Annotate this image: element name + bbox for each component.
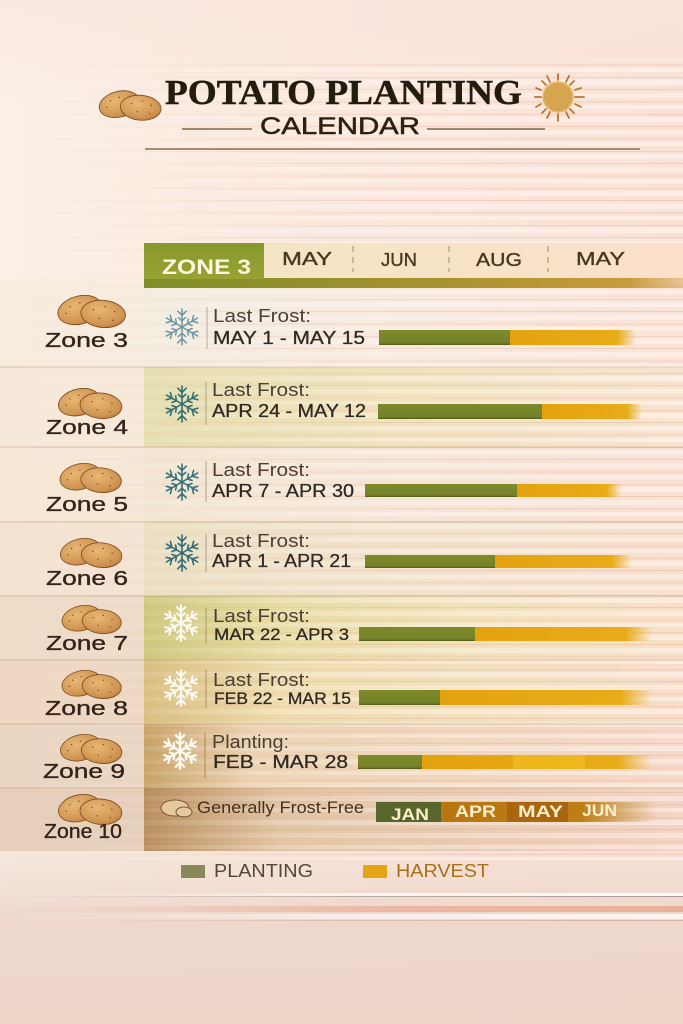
bar: [365, 555, 632, 568]
bar: [359, 690, 652, 705]
legend: harvest: HARVEST: [396, 861, 489, 881]
frost text: [212, 379, 366, 421]
month labels: MAY: [282, 249, 332, 269]
zone label: Zone 9: [43, 760, 125, 783]
frost text: FEB 22 - MAR 15: [214, 689, 351, 708]
frost text: MAR 22 - APR 3: [214, 625, 349, 644]
frost text: APR 1 - APR 21: [212, 550, 351, 571]
zone label: Zone 3: [45, 329, 128, 352]
frost icon: [163, 670, 199, 706]
frost text: Last Frost:: [213, 305, 311, 326]
bar: [358, 755, 652, 769]
month separators: [353, 246, 548, 272]
frost icon: [162, 733, 198, 769]
potato icon: [56, 790, 123, 826]
potato icon: [57, 459, 122, 494]
row: zone 7: [46, 601, 652, 655]
frost icon: [164, 535, 200, 571]
legend: harvest: [363, 861, 489, 881]
bottom band: [144, 278, 683, 288]
small potato icon: [161, 800, 192, 817]
zone 3 tab label: ZONE 3: [162, 256, 251, 279]
month labels: [282, 249, 625, 270]
frost icon: [164, 464, 200, 500]
row backgrounds: [0, 279, 683, 851]
row: zone 3: [45, 291, 636, 352]
potato icon: [59, 666, 122, 700]
month bar: JUN: [582, 802, 617, 820]
icon: sun: [535, 74, 584, 121]
frost text: Last Frost:: [212, 459, 310, 480]
legend: [181, 861, 489, 881]
frost text: Last Frost:: [213, 669, 310, 690]
title rules: [145, 129, 640, 149]
frost text: MAY 1 - MAY 15: [213, 327, 365, 348]
planting text: FEB - MAR 28: [213, 751, 348, 772]
frost text: [213, 669, 351, 708]
month labels: AUG: [476, 250, 522, 270]
zone label: Zone 6: [46, 567, 128, 590]
frost-free text: Generally Frost-Free: [197, 798, 364, 817]
frost text: APR 24 - MAY 12: [212, 400, 366, 421]
zone 3 tab: [144, 243, 264, 279]
frost text: Last Frost:: [213, 605, 310, 626]
row: zone 4: [46, 379, 642, 439]
icon: potatoes: [96, 87, 162, 122]
row: zone 8: [45, 666, 652, 720]
frost text: [213, 605, 349, 644]
frost text: [212, 459, 354, 501]
zone label: Zone 10: [44, 820, 122, 843]
zone label: Zone 5: [46, 493, 128, 516]
row: zone 9: [43, 730, 652, 783]
bar: [365, 484, 622, 497]
potato icon: [58, 534, 123, 569]
month bar: JAN: [391, 806, 429, 824]
month bar: [376, 802, 657, 824]
title block: [96, 73, 640, 149]
table header: [144, 243, 683, 288]
potato icon: [58, 730, 123, 765]
frost text: Last Frost:: [212, 530, 310, 551]
frost text: [212, 530, 351, 571]
heading: potato planting: POTATO PLANTING: [165, 73, 522, 112]
frost text: APR 7 - APR 30: [212, 480, 354, 501]
frost icon: [164, 386, 200, 422]
legend: planting: PLANTING: [214, 861, 313, 881]
heading: calendar: CALENDAR: [260, 113, 420, 140]
frost icon: [164, 309, 200, 345]
month bar: APR: [455, 803, 496, 821]
bar: [359, 627, 652, 641]
legend: planting: [181, 861, 313, 881]
zone label: Zone 7: [46, 632, 128, 655]
frost text: [213, 305, 365, 348]
potato icon: [59, 601, 122, 635]
month labels: MAY: [576, 249, 625, 269]
zone label: Zone 8: [45, 697, 128, 720]
planting text: [212, 731, 348, 772]
frost icon: [163, 605, 199, 641]
planting text: Planting:: [212, 731, 289, 752]
month labels: JUN: [381, 250, 417, 270]
potato icon: [55, 291, 127, 329]
bar: [378, 404, 642, 419]
row: zone 10: [44, 790, 657, 843]
zone label: Zone 4: [46, 416, 128, 439]
row: zone 6: [46, 530, 632, 590]
bar: [379, 330, 636, 345]
month strip: [264, 243, 683, 279]
potato icon: [56, 384, 123, 420]
row: zone 5: [46, 459, 622, 516]
frost text: Last Frost:: [212, 379, 310, 400]
month bar: MAY: [518, 803, 563, 821]
